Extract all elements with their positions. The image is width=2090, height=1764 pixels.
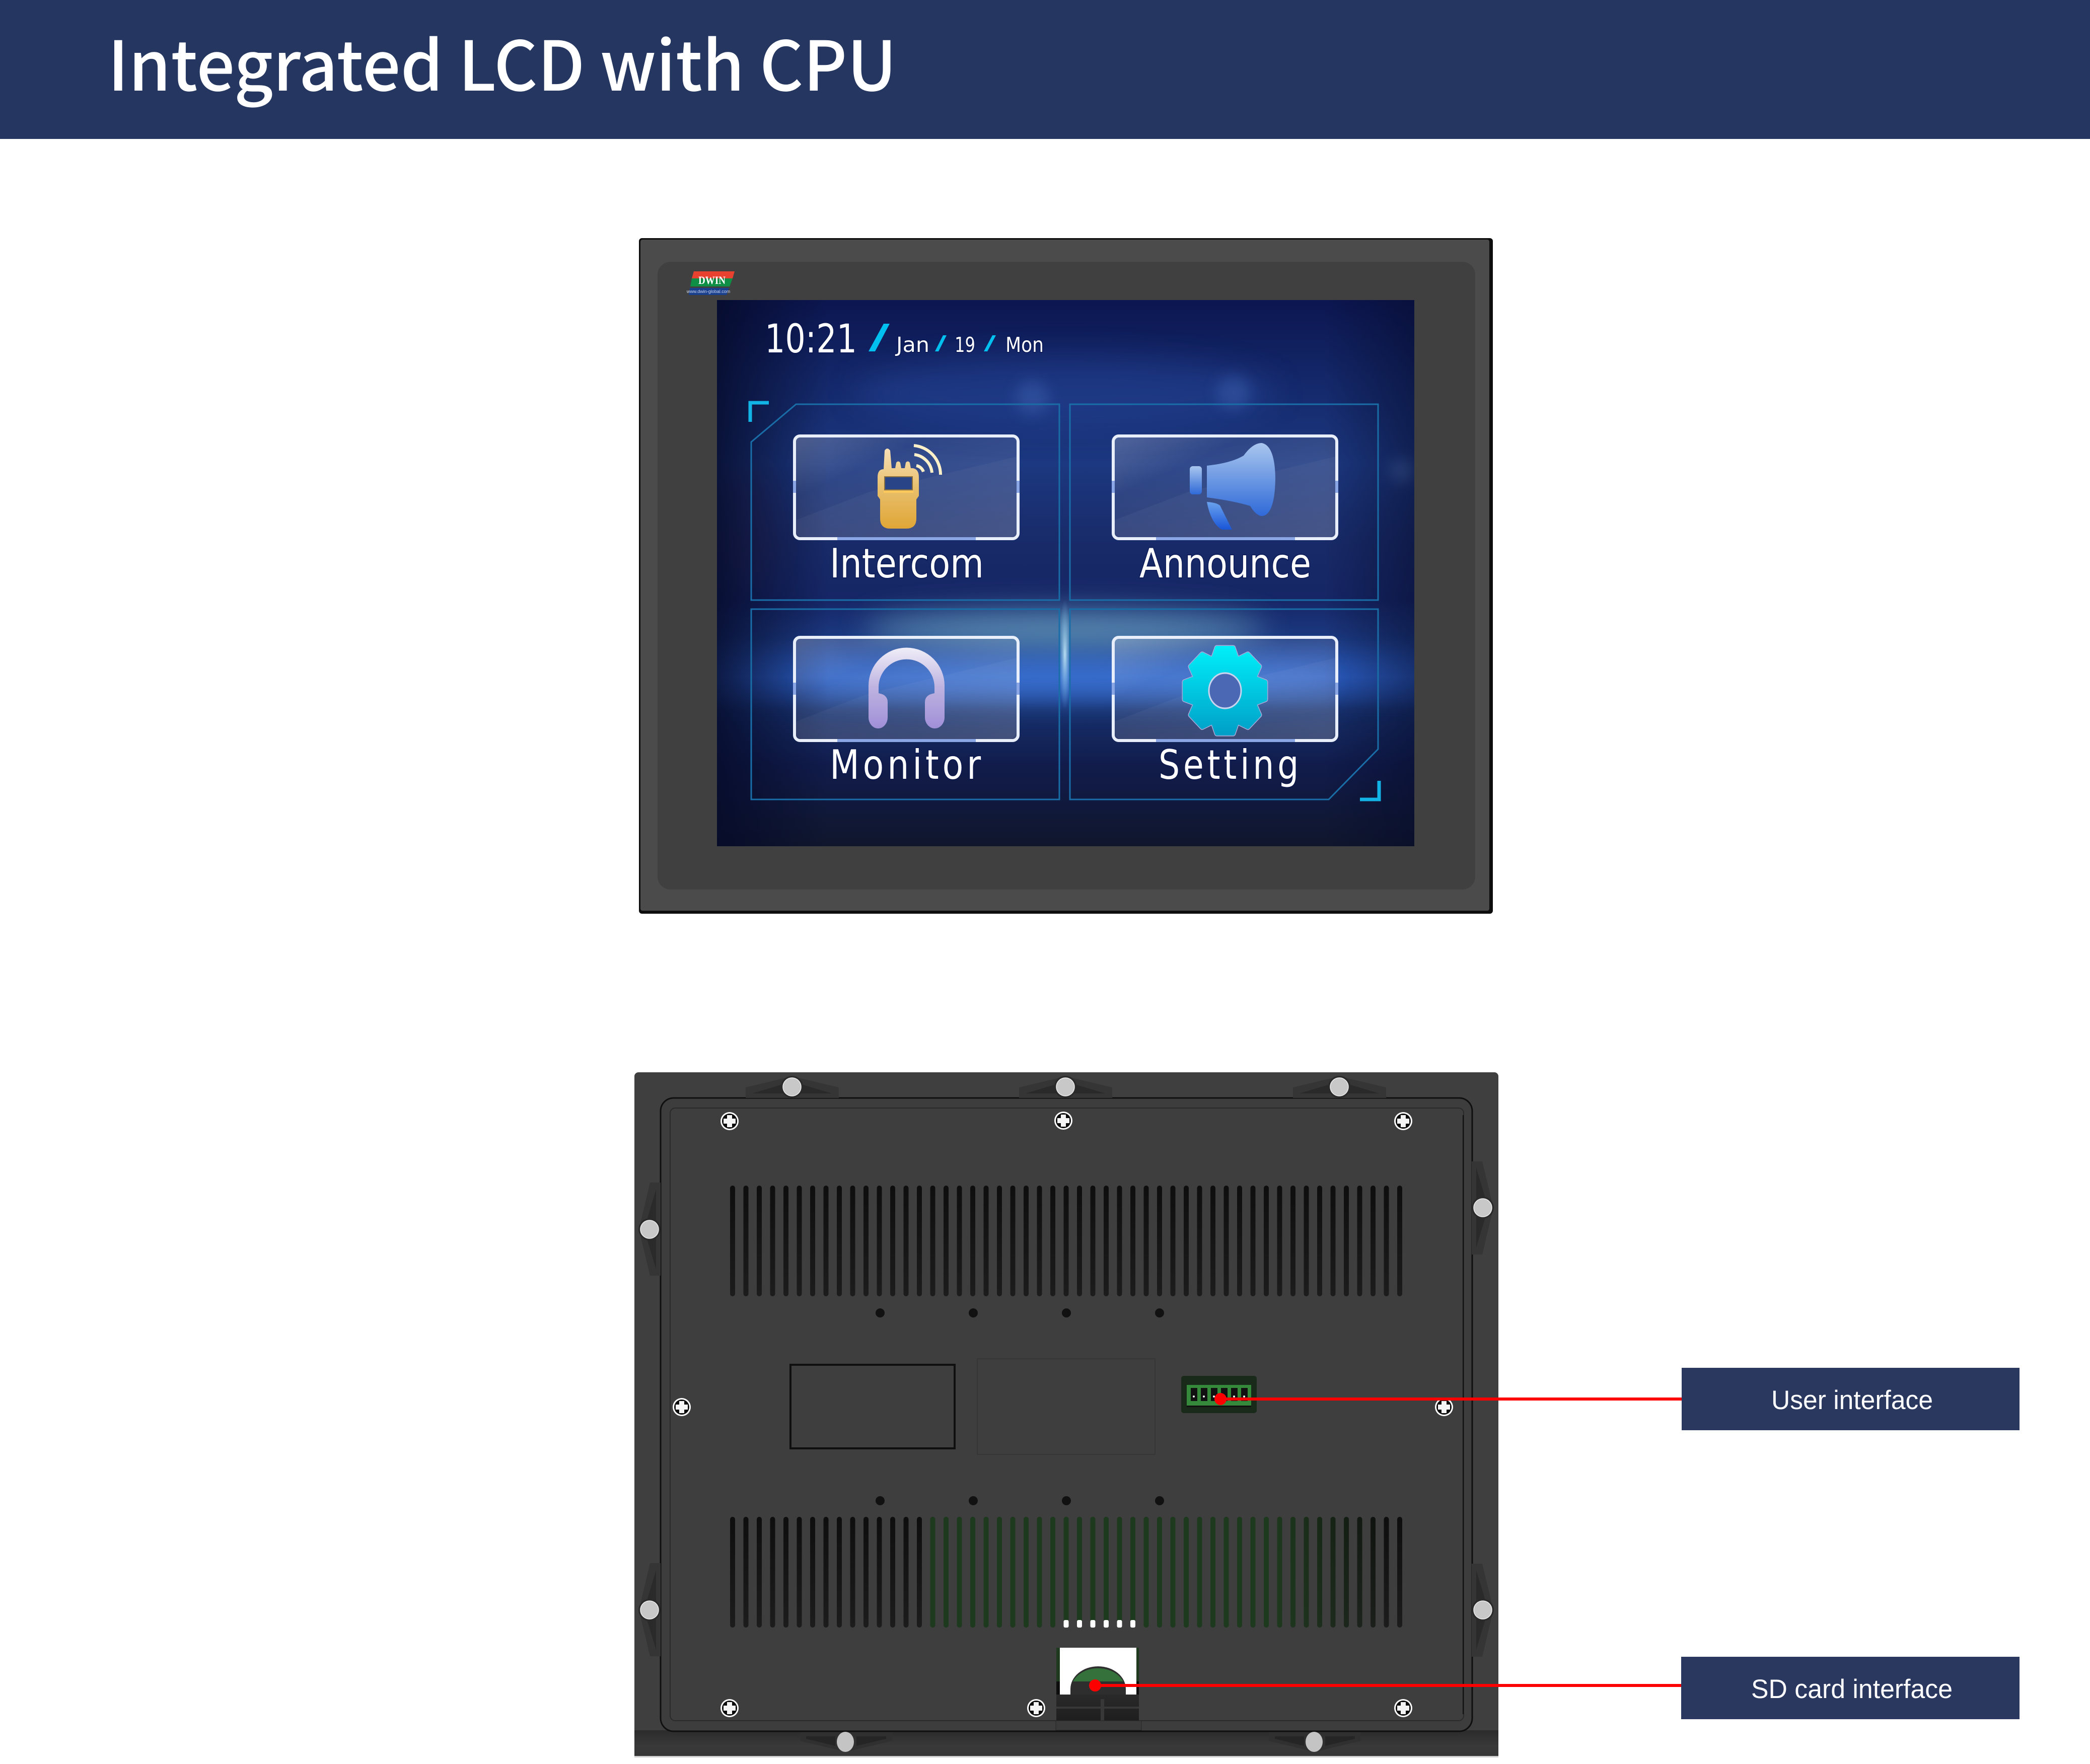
label: Announce: Announce: [1139, 540, 1311, 587]
label: SD card interface: [1681, 1657, 2020, 1719]
icon: headphones: [869, 647, 945, 728]
centre cover outline: [977, 1359, 1155, 1454]
clock and date: 19: [955, 333, 975, 357]
left cover outline: [790, 1365, 955, 1448]
label: Intercom: Intercom: [830, 540, 984, 587]
icon: DWIN logo: DWIN: [698, 274, 726, 286]
button frame: [795, 637, 1018, 741]
clock and date: Jan: [895, 333, 929, 357]
label: SD card interface: SD card interface: [1751, 1674, 1953, 1704]
SD card slot: [1056, 1648, 1141, 1730]
panel: Monitor: [751, 609, 1059, 799]
title: Integrated LCD with CPU: [108, 12, 897, 111]
callout: SD card interface: [1089, 1657, 2020, 1719]
screws: [673, 1112, 1453, 1717]
panel: Intercom: [751, 404, 1059, 600]
clock and date: 10:21: [765, 317, 857, 362]
screen: [717, 300, 1414, 846]
upper vent slots: [730, 1186, 1403, 1296]
corner bracket top left: [750, 403, 769, 422]
panel: Announce: [1070, 404, 1378, 600]
header banner: [0, 0, 2090, 139]
button frame: [1113, 637, 1337, 741]
panel: LCD rear view: [634, 1072, 1498, 1757]
panel: LCD front view: [639, 238, 1493, 914]
lower vent slots: [730, 1517, 1403, 1628]
icon: megaphone: [1190, 443, 1275, 530]
mounting clips: [638, 1076, 1494, 1752]
label: Monitor: Monitor: [830, 742, 984, 788]
label: Setting: Setting: [1159, 742, 1302, 788]
user interface connector: [1181, 1376, 1257, 1413]
clock and date: [765, 317, 1044, 362]
mounting holes: [876, 1308, 1164, 1505]
rear plate: [661, 1098, 1472, 1731]
clock and date: Mon: [1005, 333, 1044, 357]
icon: gear: [1185, 648, 1265, 733]
corner bracket bottom right: [1360, 781, 1379, 799]
label: User interface: [1682, 1368, 2020, 1430]
panel: Setting: [1070, 609, 1378, 799]
button frame: [1113, 436, 1337, 539]
callout: user interface: [1214, 1368, 2020, 1430]
icon: DWIN logo: www.dwin-global.com: [686, 289, 730, 294]
icon: DWIN logo: [686, 271, 735, 295]
button frame: [795, 436, 1018, 539]
icon: walkie talkie: [878, 446, 941, 529]
label: User interface: User interface: [1771, 1385, 1933, 1415]
